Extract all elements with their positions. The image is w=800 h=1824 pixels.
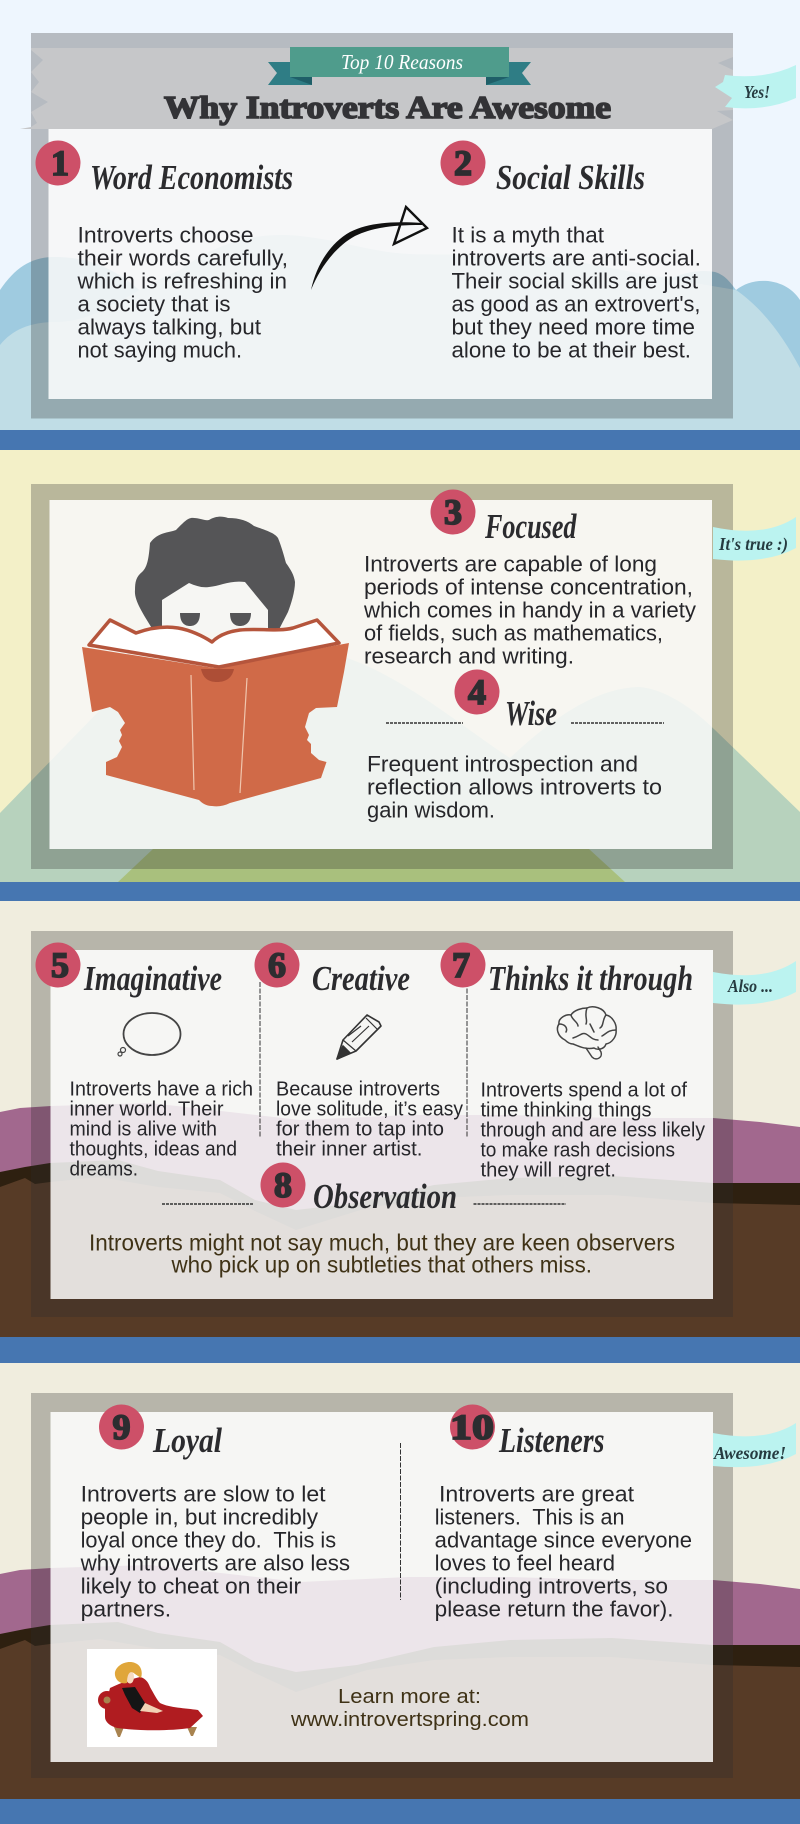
- body 1: always talking, but: [78, 314, 261, 339]
- heading 3: Focused: [484, 507, 577, 546]
- flag: Awesome!: [713, 1423, 796, 1467]
- reason 2: Social Skills: [440, 140, 701, 362]
- badge 6: 6: [268, 945, 286, 985]
- body 9: people in, but incredibly: [81, 1504, 318, 1529]
- heading 6: Creative: [312, 959, 410, 998]
- column dividers: [260, 982, 467, 1138]
- illustration: reader with book: [82, 517, 349, 806]
- learn more: www.introvertspring.com: [290, 1709, 529, 1731]
- body 4: reflection allows introverts to: [367, 774, 662, 799]
- heading 4: Wise: [505, 694, 557, 733]
- body 1: a society that is: [78, 291, 230, 316]
- body 1: which is refreshing in: [76, 268, 287, 293]
- flag: Also ...: Also ...: [727, 976, 773, 996]
- spine notch: [201, 669, 234, 682]
- badge 8: [260, 1162, 306, 1208]
- body 9: why introverts are also less: [80, 1550, 350, 1575]
- body 8: Introverts might not say much, but they are keen observers: [89, 1229, 675, 1255]
- heading 9: Loyal: [152, 1421, 222, 1460]
- section 3 background: landscape: [0, 901, 800, 1337]
- heading 2: Social Skills: [496, 158, 645, 197]
- body 5: [70, 1077, 253, 1180]
- icon: pencil: [337, 1015, 381, 1059]
- body 5: mind is alive with: [70, 1117, 217, 1140]
- icon: brain: [557, 1007, 616, 1059]
- body 9: loyal once they do. This is: [81, 1527, 336, 1552]
- couch body: [105, 1677, 203, 1730]
- inner panel: section 4: [50, 1412, 713, 1762]
- body 8: who pick up on subtleties that others miss.: [171, 1251, 592, 1277]
- badge 9: 9: [112, 1407, 130, 1447]
- frame: section 3: [31, 931, 733, 1317]
- body 10: Introverts are great: [439, 1481, 634, 1506]
- body 2: but they need more time: [452, 314, 695, 339]
- badge 4: [454, 670, 500, 714]
- couch legs: [114, 1727, 197, 1737]
- flag: Also ...: [713, 961, 796, 1005]
- body 2: It is a myth that: [452, 222, 604, 247]
- section 1 background: sky and clouds: [0, 0, 800, 430]
- body 7: time thinking things: [480, 1098, 652, 1121]
- column divider: [400, 1443, 402, 1600]
- face: [162, 582, 268, 632]
- body 6: [276, 1077, 464, 1160]
- body 3: of fields, such as mathematics,: [364, 620, 663, 645]
- reason 5: Imaginative: [36, 942, 253, 1180]
- badge 3: 3: [444, 492, 462, 532]
- body 2: [452, 222, 701, 362]
- body 2: Their social skills are just: [452, 268, 698, 293]
- body 4: gain wisdom.: [367, 797, 495, 822]
- learn more: Learn more at:: [338, 1686, 481, 1708]
- frame: section 1: [31, 33, 733, 418]
- spine lines: [191, 675, 247, 793]
- heading 8: Observation: [313, 1177, 457, 1216]
- badge 8: 8: [274, 1165, 292, 1205]
- cushion: [104, 1696, 110, 1704]
- badge 2: 2: [454, 143, 472, 183]
- body 5: Introverts have a rich: [70, 1077, 253, 1100]
- badge 1: 1: [51, 143, 69, 183]
- heading 10: Listeners: [498, 1421, 604, 1460]
- body 1: Introverts choose: [78, 222, 253, 247]
- learn more: [290, 1686, 529, 1731]
- frame: section 4: [31, 1393, 733, 1778]
- book pages: [89, 620, 339, 667]
- reason 4: Wise: [367, 670, 664, 822]
- badge 6: [254, 942, 300, 988]
- body 10: loves to feel heard: [435, 1550, 615, 1575]
- book cover: [82, 643, 349, 806]
- body 1: [76, 222, 288, 362]
- body 3: which comes in handy in a variety: [363, 597, 696, 622]
- reason 9: Loyal: [80, 1404, 350, 1621]
- inner panel: section 1: [48, 129, 712, 399]
- body 10: please return the favor).: [435, 1596, 674, 1621]
- body 10: (including introverts, so: [435, 1573, 668, 1598]
- badge 5: [36, 942, 80, 988]
- inner panel: section 3: [50, 950, 713, 1299]
- body 9: partners.: [81, 1596, 171, 1621]
- body 7: through and are less likely: [480, 1118, 706, 1141]
- face: [126, 1670, 134, 1684]
- body 6: their inner artist.: [276, 1137, 422, 1160]
- legs: [140, 1703, 163, 1713]
- icon: thought bubble: [118, 1013, 180, 1056]
- body 7: they will regret.: [480, 1158, 616, 1181]
- body 1: their words carefully,: [78, 245, 288, 270]
- reason 3: Focused: [363, 490, 696, 668]
- body 3: [363, 551, 696, 668]
- dashed rules 4: [386, 722, 664, 724]
- heading 1: Word Economists: [90, 158, 293, 197]
- figure dress: [122, 1687, 145, 1713]
- section 4 background: landscape: [0, 1363, 800, 1799]
- badge 5: 5: [51, 945, 69, 985]
- body 1: not saying much.: [78, 337, 242, 362]
- top band with torn edges: [20, 48, 733, 129]
- flag: Yes!: Yes!: [744, 82, 770, 102]
- body 3: Introverts are capable of long: [364, 551, 657, 576]
- badge 2: [440, 140, 486, 186]
- body 5: inner world. Their: [70, 1097, 224, 1120]
- body 7: Introverts spend a lot of: [480, 1078, 687, 1101]
- body 3: periods of intense concentration,: [364, 574, 693, 599]
- body 2: alone to be at their best.: [452, 337, 691, 362]
- frame: section 2: [31, 484, 733, 869]
- body 3: research and writing.: [364, 643, 574, 668]
- badge 9: [99, 1404, 144, 1450]
- reason 10: Listeners: [435, 1404, 692, 1621]
- body 9: [80, 1481, 350, 1621]
- body 7: to make rash decisions: [480, 1138, 675, 1161]
- badge 3: [430, 490, 476, 534]
- divider bar 3: [0, 1337, 800, 1363]
- badge 7: [440, 942, 486, 988]
- body 10: advantage since everyone: [435, 1527, 692, 1552]
- heading 5: Imaginative: [83, 959, 222, 998]
- body 5: thoughts, ideas and: [70, 1137, 237, 1160]
- badge 4: 4: [468, 672, 486, 712]
- body 7: [480, 1078, 706, 1181]
- title: Why Introverts Are Awesome: [164, 89, 611, 125]
- section 2 background: hills: [0, 450, 800, 882]
- inner panel: section 2: [50, 500, 712, 849]
- flag: Awesome!: Awesome!: [713, 1443, 786, 1463]
- divider bar 1: [0, 430, 800, 450]
- body 6: Because introverts: [276, 1077, 440, 1100]
- reason 6: Creative: [254, 942, 464, 1160]
- arrow: [311, 207, 427, 290]
- hair: [135, 517, 295, 632]
- ribbon banner: Top 10 Reasons: [268, 47, 531, 85]
- reason 8: Observation: [89, 1162, 675, 1277]
- body 4: Frequent introspection and: [367, 751, 638, 776]
- illustration: woman on red couch: [87, 1649, 217, 1747]
- body 9: Introverts are slow to let: [81, 1481, 326, 1506]
- body 10: [435, 1481, 692, 1621]
- ribbon banner: Top 10 Reasons: Top 10 Reasons: [341, 50, 463, 74]
- body 6: for them to tap into: [276, 1117, 444, 1140]
- badge 7: 7: [452, 945, 470, 985]
- body 5: dreams.: [70, 1157, 138, 1180]
- divider bar 4: [0, 1799, 800, 1824]
- flag: Yes!: [715, 65, 796, 108]
- body 2: introverts are anti-social.: [452, 245, 701, 270]
- dashed rules 8: [162, 1203, 566, 1205]
- badge 10: 10: [450, 1407, 494, 1447]
- badge 1: [36, 140, 80, 186]
- flag: It's true :): [713, 517, 796, 561]
- couch arm: [98, 1691, 116, 1709]
- hair: [115, 1662, 142, 1683]
- body 9: likely to cheat on their: [81, 1573, 301, 1598]
- divider bar 2: [0, 882, 800, 901]
- body 8: [89, 1229, 675, 1277]
- body 2: as good as an extrovert's,: [452, 291, 700, 316]
- reason 1: Word Economists: [36, 140, 293, 362]
- body 6: love solitude, it’s easy: [276, 1097, 464, 1120]
- body 4: [367, 751, 662, 822]
- heading 7: Thinks it through: [488, 959, 693, 998]
- eyes: [180, 613, 251, 626]
- flag: It's true :): It's true :): [718, 534, 788, 555]
- body 10: listeners. This is an: [435, 1504, 624, 1529]
- reason 7: Thinks it through: [440, 942, 706, 1181]
